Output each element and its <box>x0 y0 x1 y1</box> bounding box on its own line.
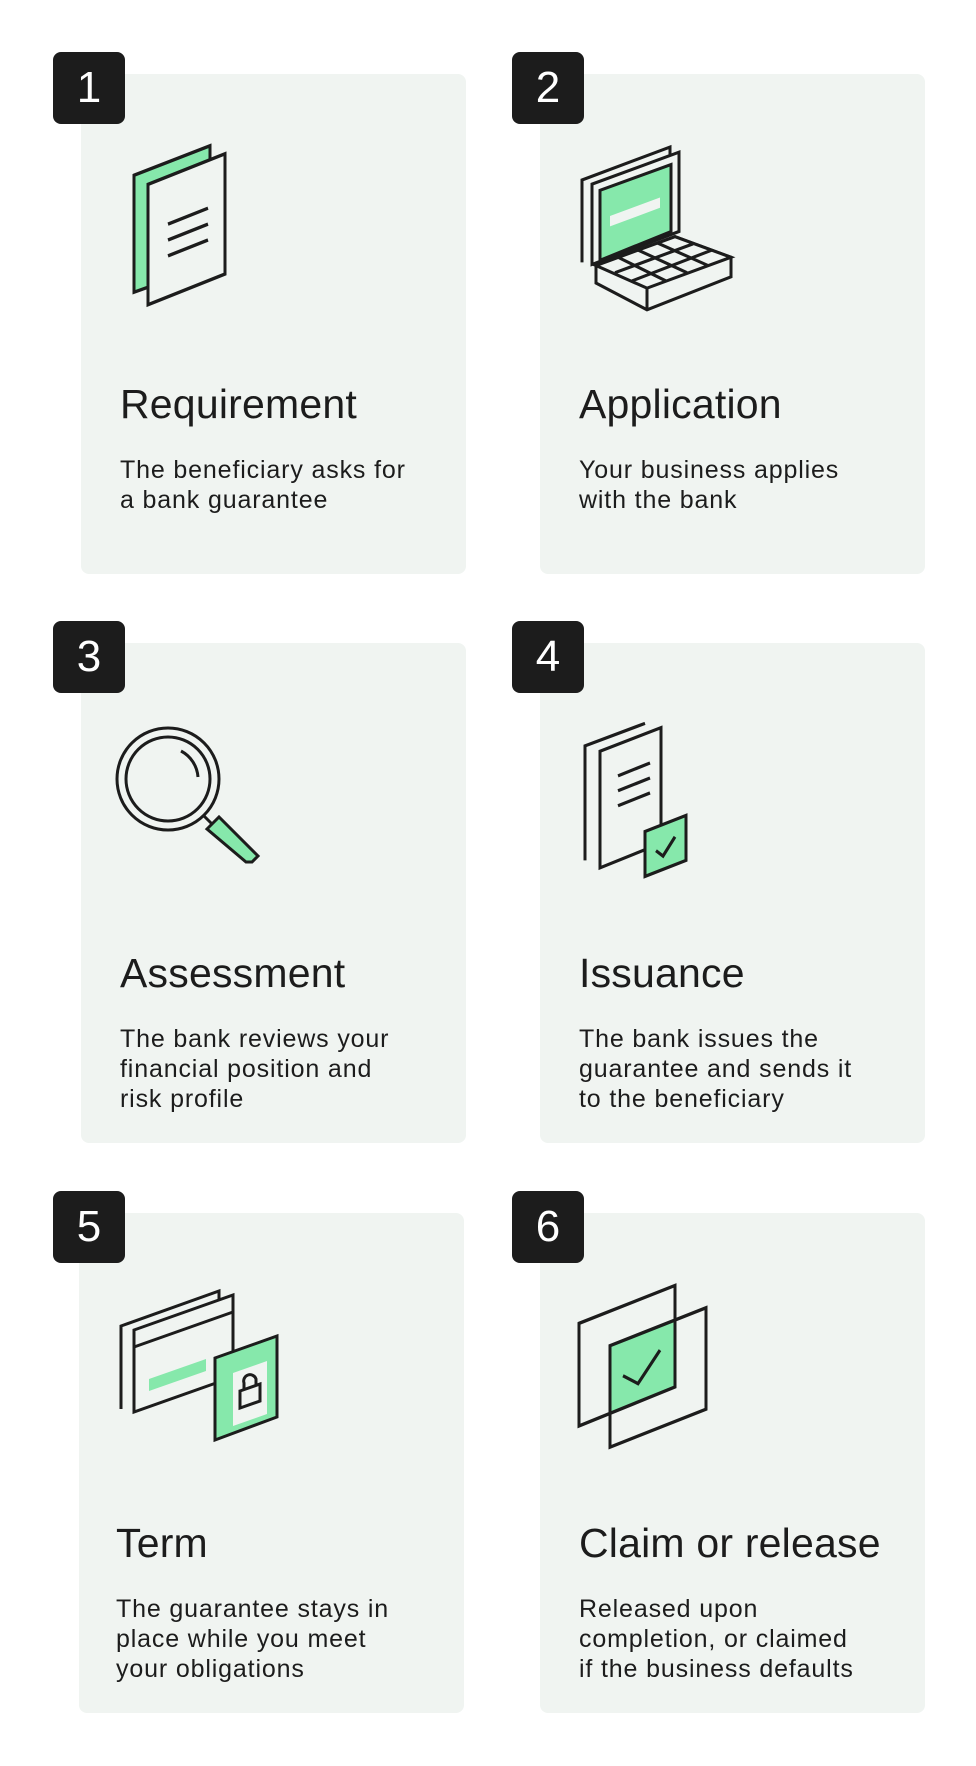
card 4: issuance <box>540 643 925 1143</box>
icon: laptop <box>580 144 736 312</box>
title: Term <box>116 1520 208 1566</box>
text: your obligations <box>116 1655 305 1683</box>
title: Assessment <box>120 950 345 996</box>
title: Issuance <box>579 950 745 996</box>
title: Application <box>579 381 782 427</box>
badge 2: 2 <box>536 63 560 112</box>
title: Requirement <box>120 381 357 427</box>
badge 4 <box>512 621 584 693</box>
text: The bank issues the <box>579 1025 819 1053</box>
badge 3 <box>53 621 125 693</box>
text: The beneficiary asks for <box>120 456 406 484</box>
badge 5 <box>53 1191 125 1263</box>
icon: magnifier <box>116 726 260 864</box>
text: if the business defaults <box>579 1655 854 1683</box>
icon: screen and lock <box>120 1288 278 1442</box>
text: guarantee and sends it <box>579 1055 852 1083</box>
badge 1: 1 <box>77 63 101 112</box>
badge 1 <box>53 52 125 124</box>
text <box>579 1025 852 1113</box>
icon: document with check <box>584 722 688 879</box>
text: Released upon <box>579 1595 758 1623</box>
text: completion, or claimed <box>579 1625 848 1653</box>
text: Your business applies <box>579 456 839 484</box>
text <box>579 456 839 514</box>
badge 6 <box>512 1191 584 1263</box>
text <box>120 1025 389 1113</box>
text: a bank guarantee <box>120 486 328 514</box>
text: to the beneficiary <box>579 1085 785 1113</box>
badge 3: 3 <box>77 632 101 681</box>
text: The bank reviews your <box>120 1025 389 1053</box>
card 3: assessment <box>81 643 466 1143</box>
icon: documents <box>132 143 226 308</box>
card 6: claim or release <box>540 1213 925 1713</box>
card 5: term <box>79 1213 464 1713</box>
badge 5: 5 <box>77 1202 101 1251</box>
text <box>120 456 406 514</box>
text: financial position and <box>120 1055 372 1083</box>
card 2: application <box>540 74 925 574</box>
text: with the bank <box>579 486 737 514</box>
badge 4: 4 <box>536 632 560 681</box>
text <box>116 1595 389 1683</box>
badge 2 <box>512 52 584 124</box>
title: Claim or release <box>579 1520 881 1566</box>
badge 6: 6 <box>536 1202 560 1251</box>
text: The guarantee stays in <box>116 1595 389 1623</box>
icon: overlapping frames with check <box>578 1283 708 1450</box>
text: risk profile <box>120 1085 244 1113</box>
text <box>579 1595 854 1683</box>
card 1: requirement <box>81 74 466 574</box>
text: place while you meet <box>116 1625 366 1653</box>
